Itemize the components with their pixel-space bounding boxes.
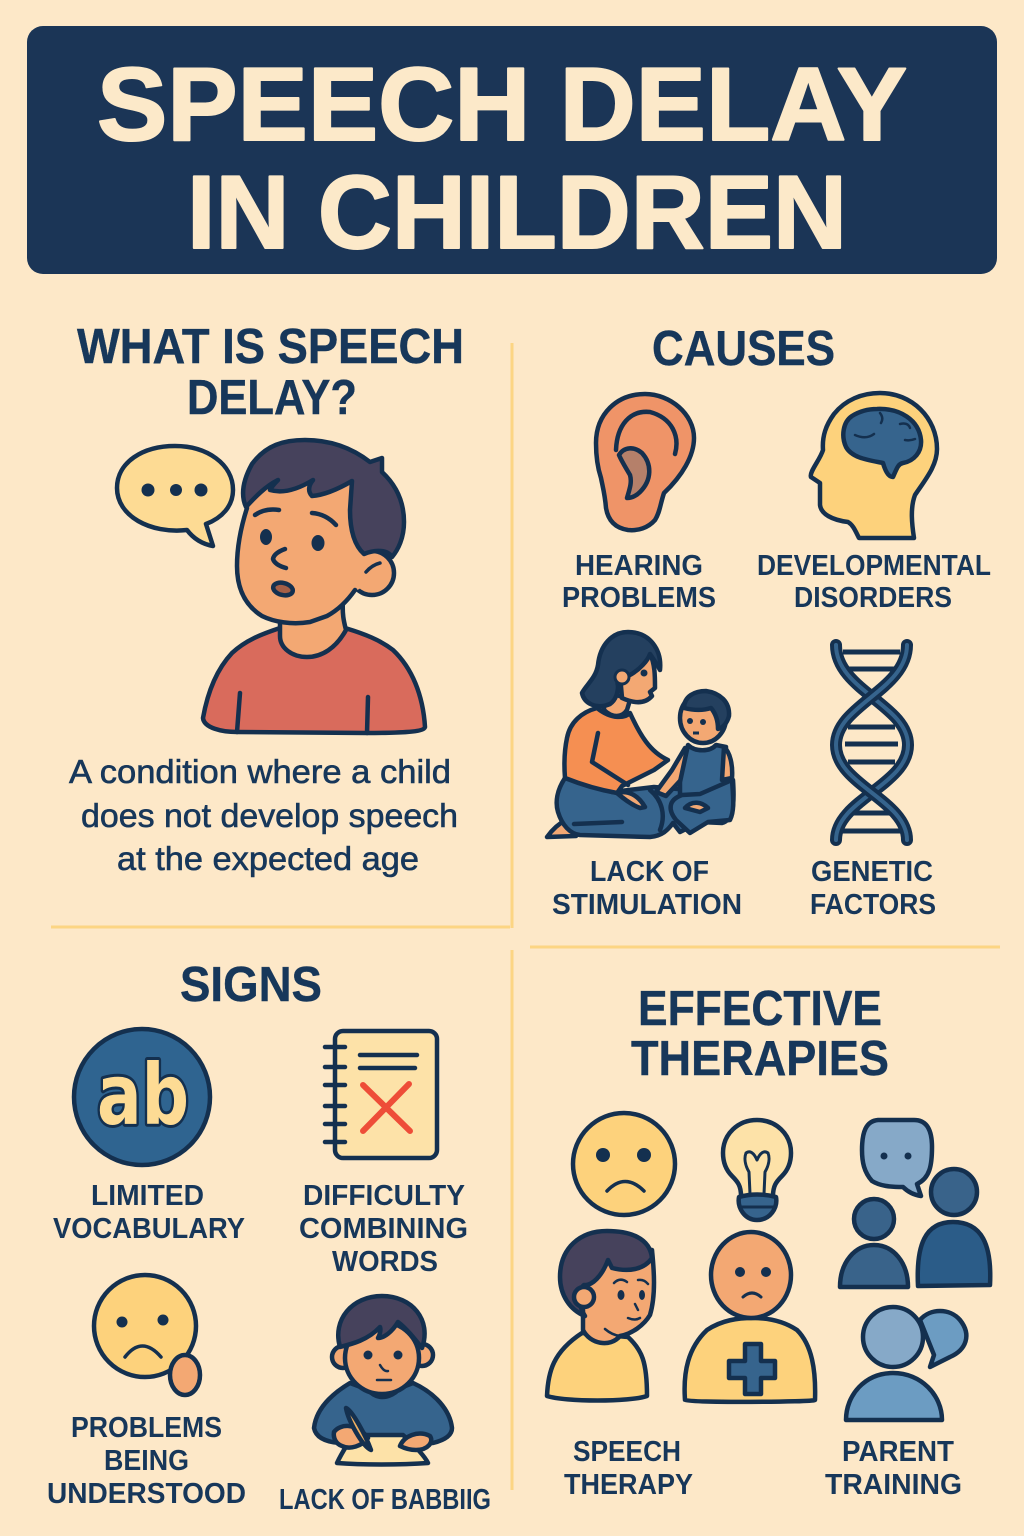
label: GENETIC [811,856,933,888]
title: SPEECH DELAY [97,47,907,163]
label [825,1436,962,1501]
heading: signs: SIGNS [180,958,322,1012]
label: TRAINING [825,1469,962,1501]
icon: head with brain [811,393,937,538]
heading: effective therapies: THERAPIES [631,1032,889,1086]
label: LACK OF [590,856,709,888]
icon: sad face with hand [94,1275,200,1395]
icon: ear [596,394,694,530]
label: LACK OF BABBIIG [279,1484,491,1516]
icon: sad face [573,1113,675,1215]
label: WORDS [332,1246,438,1278]
label: BEING [104,1445,189,1477]
definition text: does not develop speech [81,797,458,834]
illustration: child writing [314,1296,452,1464]
label: COMBINING [299,1213,468,1245]
icon: ab circle [74,1029,210,1165]
label: DISORDERS [794,582,952,614]
icon: speech bubble with dots [117,446,233,546]
icon: parent with speech bubble [846,1307,966,1420]
panel: what is speech delay [69,320,464,877]
label: SPEECH [573,1436,681,1468]
label: VOCABULARY [53,1213,245,1245]
label: HEARING [575,550,703,582]
cause: lack of stimulation [547,632,742,921]
label: THERAPY [564,1469,693,1501]
definition text: A condition where a child [69,753,451,790]
label: STIMULATION [552,889,742,921]
heading: causes: CAUSES [652,322,835,376]
label [53,1180,245,1245]
icon: ab circle: ab [97,1046,189,1144]
title: IN CHILDREN [187,155,847,271]
title [97,47,907,271]
icon: parents talking [840,1120,990,1287]
label: DIFFICULTY [303,1180,465,1212]
sign: problems being understood [47,1275,246,1510]
icon: light bulb [723,1120,791,1220]
label: LIMITED [91,1180,204,1212]
label: FACTORS [810,889,936,921]
cause: developmental disorders [757,393,991,614]
heading: what is speech delay: WHAT IS SPEECH [77,320,464,374]
definition text [69,753,458,877]
therapy: parent training [825,1120,990,1501]
cause: hearing problems [562,394,716,614]
label [47,1412,246,1510]
heading: effective therapies [631,982,889,1086]
definition text: at the expected age [117,840,419,877]
heading: what is speech delay [77,320,464,425]
therapy: speech therapy [547,1113,791,1501]
sign: lack of babbling [279,1296,491,1516]
label [562,550,716,614]
sign: limited vocabulary [53,1029,245,1245]
panel: effective therapies [547,982,990,1501]
panel: causes [547,322,991,921]
sign: difficulty combining words [299,1031,468,1278]
label: DEVELOPMENTAL [757,550,991,582]
illustration: boy in profile [547,1231,654,1400]
heading: what is speech delay: DELAY? [187,371,357,425]
icon: notebook with red X [325,1031,437,1158]
label [552,856,742,921]
heading: effective therapies: EFFECTIVE [638,982,882,1036]
label [299,1180,468,1278]
label [757,550,991,614]
label [564,1436,693,1501]
illustration: worried boy [203,440,425,733]
label: PARENT [842,1436,954,1468]
label [810,856,936,921]
panel: signs [47,958,491,1516]
label: PROBLEMS [71,1412,222,1444]
cause: genetic factors [810,645,936,921]
therapy: therapist [685,1232,815,1402]
icon: DNA helix [836,645,908,840]
label: PROBLEMS [562,582,716,614]
label: UNDERSTOOD [47,1478,246,1510]
title banner [27,26,997,274]
illustration: mother and child [547,632,734,837]
